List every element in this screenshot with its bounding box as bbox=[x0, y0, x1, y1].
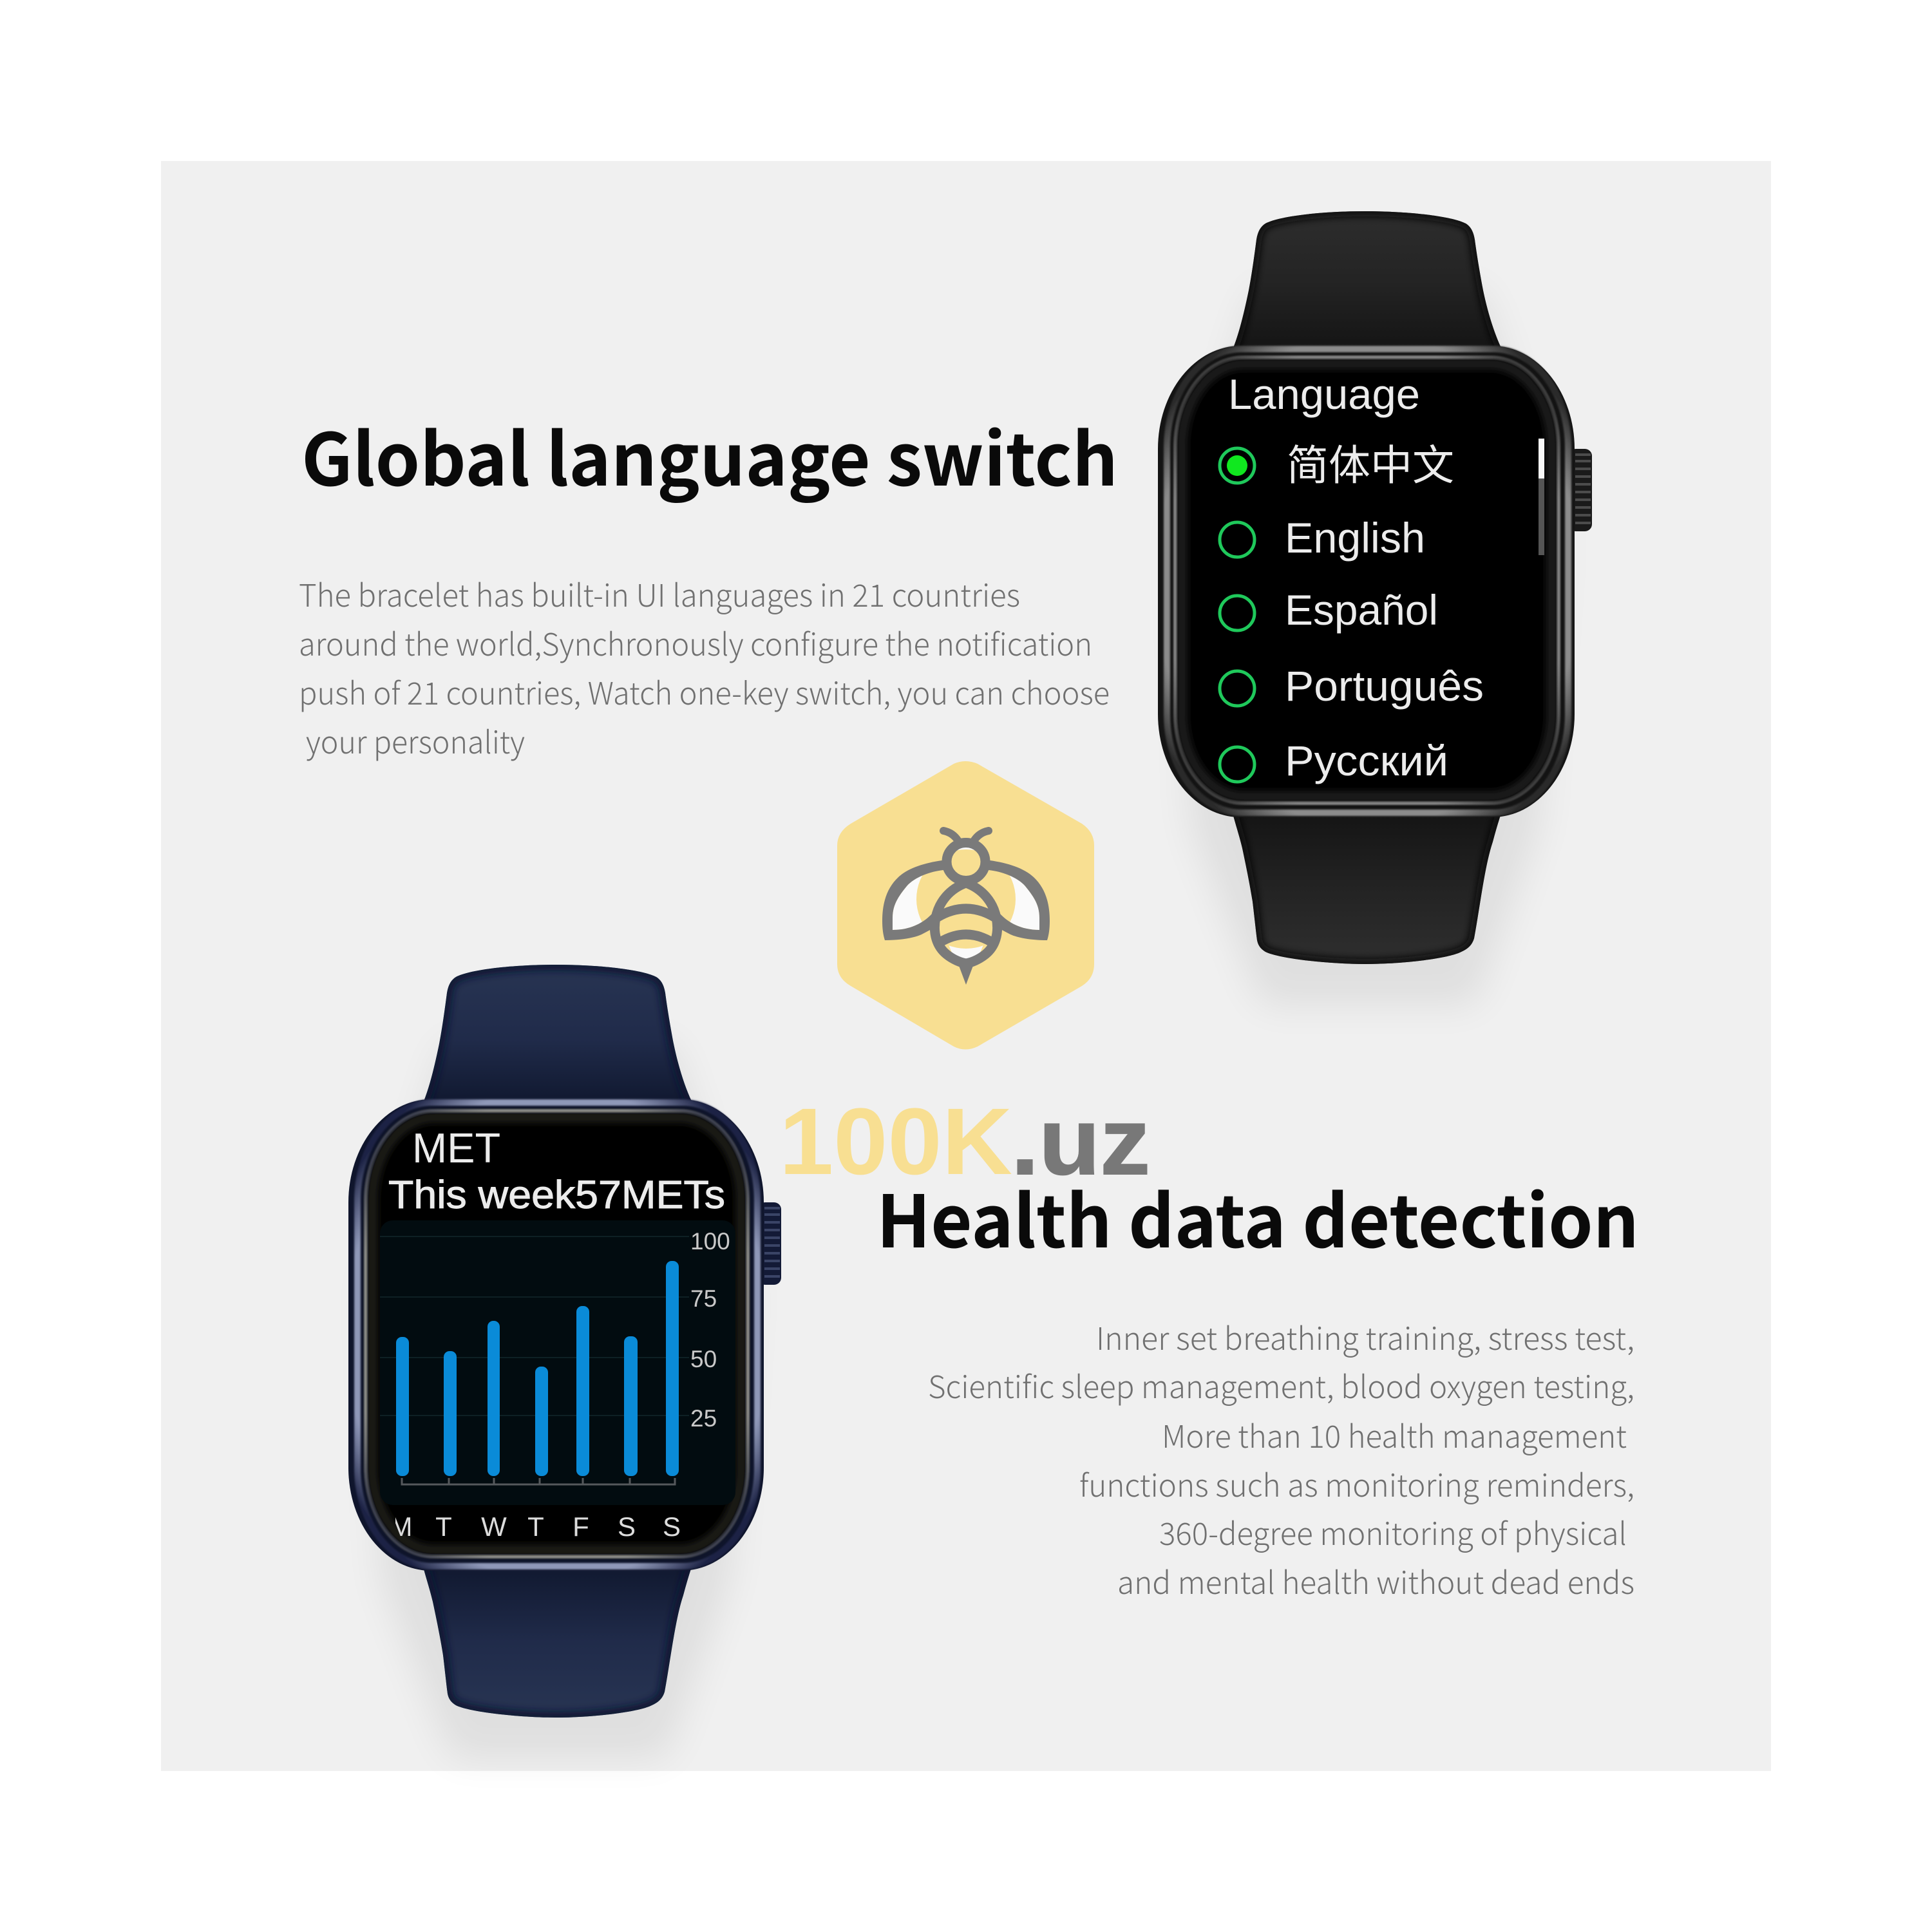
title: MET: MET bbox=[412, 1124, 500, 1171]
text block: language description: The bracelet has built-in UI languages in 21 countries bbox=[299, 571, 1020, 616]
bar chart bbox=[396, 1261, 679, 1476]
option: Russian: Русский bbox=[1285, 737, 1448, 784]
chart panel bbox=[380, 1220, 735, 1505]
watch case bbox=[348, 1099, 764, 1571]
watch: black language watch bbox=[1158, 206, 1592, 1005]
chart axis with ticks bbox=[402, 1478, 675, 1484]
subtitle: This week57METs: This week57METs bbox=[388, 1173, 725, 1217]
logo text: 100K.uz: .uz bbox=[1011, 1089, 1150, 1195]
heading: Global language switch: Global language switch bbox=[301, 402, 1118, 507]
text block: health description: Inner set breathing training, stress test, bbox=[1096, 1314, 1634, 1359]
logo text: 100K.uz: 100K bbox=[779, 1089, 1012, 1195]
text block: language description: around the world,Synchronously configure the notification bbox=[299, 620, 1092, 665]
y axis labels: 50 bbox=[690, 1346, 717, 1372]
hexagon background bbox=[837, 761, 1094, 1050]
icon: bee bbox=[882, 831, 1050, 985]
watch strap top bbox=[424, 965, 692, 1100]
text block: language description: push of 21 countries, Watch one-key switch, you can choose bbox=[299, 668, 1110, 714]
text block: health description: and mental health without dead ends bbox=[1117, 1558, 1634, 1603]
watch strap bottom bbox=[424, 1570, 690, 1718]
text block: health description: Scientific sleep management, blood oxygen testing, bbox=[928, 1362, 1634, 1407]
x axis day labels: T bbox=[435, 1511, 452, 1542]
watch crown bbox=[1569, 449, 1592, 531]
x axis day labels: S bbox=[618, 1511, 636, 1542]
x axis day labels: S bbox=[663, 1511, 681, 1542]
logo text: 100K.uz bbox=[779, 1089, 1150, 1195]
text block: language description bbox=[299, 571, 1110, 762]
option: English bbox=[1220, 514, 1425, 562]
y axis labels: 100 bbox=[690, 1228, 730, 1255]
option: English: English bbox=[1285, 514, 1425, 562]
y axis labels: 25 bbox=[690, 1405, 717, 1432]
text block: language description: your personality bbox=[306, 717, 525, 762]
heading: Health data detection: Health data detection bbox=[876, 1164, 1639, 1269]
scrollbar bbox=[1539, 439, 1544, 555]
screen: MET chart bbox=[380, 1124, 735, 1542]
watch shadow bbox=[369, 1043, 749, 1758]
logo: bee hexagon bbox=[779, 761, 1150, 1195]
x axis day labels: T bbox=[527, 1511, 544, 1542]
watch strap bottom bbox=[1234, 817, 1501, 964]
y axis labels: 75 bbox=[690, 1285, 717, 1312]
watch: navy MET watch bbox=[348, 960, 781, 1758]
option: Português: Português bbox=[1285, 662, 1484, 710]
text block: health description bbox=[928, 1314, 1634, 1603]
watch shadow bbox=[1179, 290, 1558, 1005]
option: Simplified Chinese selected: 简体中文 bbox=[1287, 431, 1454, 492]
option: Español: Español bbox=[1285, 586, 1438, 634]
x axis day labels bbox=[395, 1517, 680, 1537]
watch strap top bbox=[1234, 211, 1501, 346]
screen: language list bbox=[1220, 370, 1544, 784]
text block: health description: More than 10 health management bbox=[1162, 1412, 1627, 1457]
x axis day labels: M bbox=[390, 1511, 412, 1542]
x axis day labels: F bbox=[573, 1511, 589, 1542]
chart grid lines bbox=[380, 1236, 689, 1416]
y axis labels bbox=[690, 1228, 730, 1432]
watch case bbox=[1158, 346, 1575, 817]
title: Language: Language bbox=[1228, 370, 1420, 418]
panel: grey background bbox=[161, 161, 1771, 1771]
text block: health description: 360-degree monitoring of physical bbox=[1159, 1509, 1627, 1554]
option: Russian bbox=[1220, 737, 1448, 784]
watch crown bbox=[758, 1202, 781, 1285]
text block: health description: functions such as monitoring reminders, bbox=[1079, 1461, 1634, 1506]
x axis day labels: W bbox=[481, 1511, 507, 1542]
